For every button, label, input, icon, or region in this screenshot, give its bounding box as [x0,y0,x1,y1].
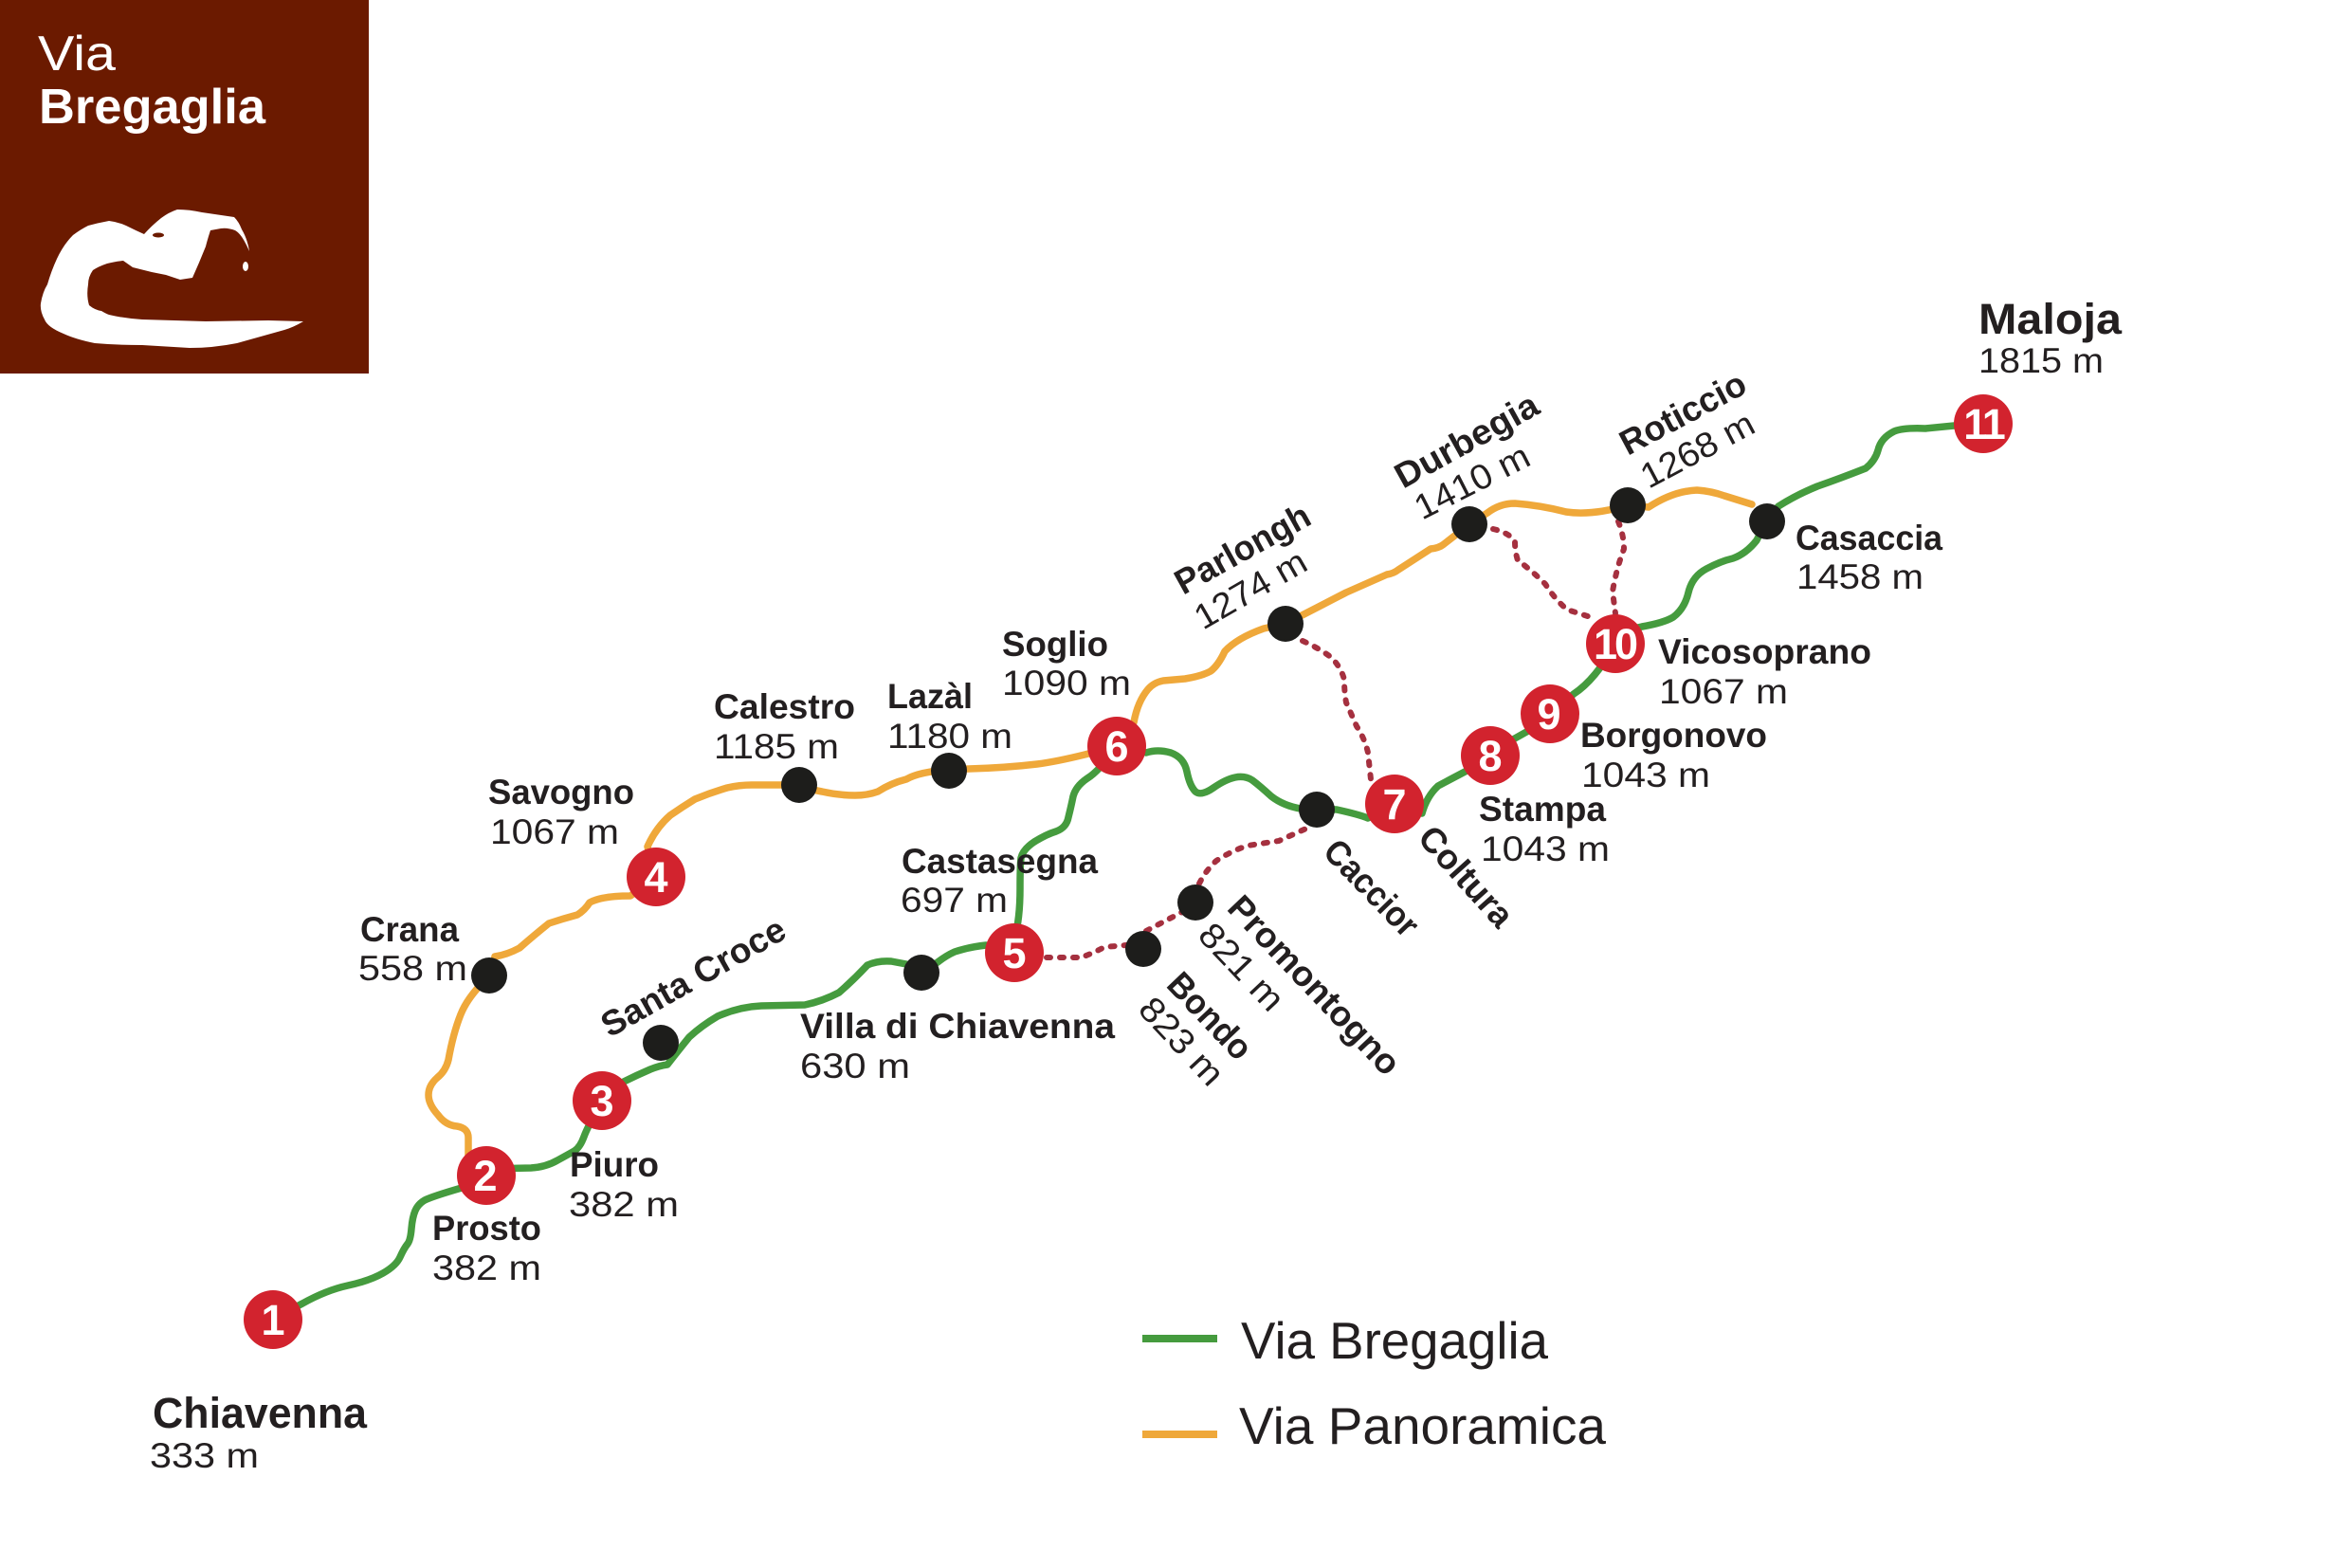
label: Soglio [1002,625,1131,702]
label: Casaccia: Casaccia [1796,519,1942,557]
numbered stage marker 8 [1461,726,1520,785]
numbered stage marker 5 [985,923,1044,982]
label: Chiavenna [150,1389,368,1475]
label: Lazàl: 1180 m [887,717,1012,756]
label: Borgonovo [1580,716,1767,794]
label: Roticcio: 1268 m [1634,404,1761,496]
numbered stage marker 1 [244,1290,302,1349]
label: Maloja [1978,295,2123,380]
label: Borgonovo: 1043 m [1581,756,1710,794]
numbered stage marker 7: 7 [1382,780,1407,829]
numbered stage marker 8: 8 [1478,732,1503,780]
label: Soglio: 1090 m [1002,664,1131,702]
label: Bondo [1131,964,1260,1093]
route: dotted connections [1047,521,1624,957]
numbered stage marker 6: 6 [1104,722,1129,771]
label: Piuro [569,1145,679,1224]
label: Castasegna: Castasegna [902,842,1098,881]
label: Crana: Crana [360,910,459,949]
numbered stage marker 3: 3 [590,1077,614,1125]
label: Villa di Chiavenna: Villa di Chiavenna [800,1007,1115,1046]
label: Durbegia: Durbegia [1388,385,1545,496]
route: Via Panoramica (orange) [428,490,1752,1176]
label: Vicosoprano: 1067 m [1659,672,1788,711]
label: Maloja: Maloja [1978,295,2123,343]
numbered stage marker 10: 10 [1594,620,1637,668]
numbered stage marker 9 [1521,684,1579,743]
title: Via Bregaglia [38,27,266,135]
numbered stage marker 2 [457,1146,516,1205]
label: Bondo: 823 m [1131,989,1232,1093]
label: Bondo: Bondo [1159,964,1260,1067]
label: Lazàl [887,677,1012,756]
label: Villa di Chiavenna: 630 m [800,1047,910,1085]
route: Via Bregaglia (green) [273,423,1983,1319]
label: Prosto: 382 m [432,1249,541,1287]
numbered stage marker 10 [1586,614,1645,673]
label: Promontogno: Promontogno [1220,887,1409,1083]
icon: brush stroke bird [41,210,303,348]
label: Coltura: Coltura [1411,818,1522,936]
label: Calestro [714,687,855,766]
label: Stampa: Stampa [1479,790,1606,829]
label: Santa Croce: Santa Croce [594,909,793,1045]
label: Chiavenna: 333 m [150,1436,259,1475]
label: Villa di Chiavenna [800,1007,1115,1085]
label: Calestro: Calestro [714,687,855,726]
label: Crana: 558 m [358,949,467,988]
label: Vicosoprano [1658,632,1871,711]
label: Piuro: Piuro [570,1145,659,1184]
label: Savogno: Savogno [488,773,634,811]
numbered stage marker 3 [573,1071,631,1130]
label: Casaccia: 1458 m [1796,557,1924,596]
label: Crana [358,910,467,988]
label: Soglio: Soglio [1002,625,1108,664]
numbered stage marker 2: 2 [473,1152,498,1200]
label: Vicosoprano: Vicosoprano [1658,632,1871,671]
numbered stage marker 4: 4 [644,853,668,902]
label: Castasegna [901,842,1098,920]
numbered stage marker 5: 5 [1002,929,1027,977]
numbered stage marker 4 [627,848,685,906]
label: Savogno [488,773,634,851]
label: Savogno: 1067 m [490,812,619,851]
label: Durbegia: 1410 m [1408,436,1536,527]
legend item: Via Bregaglia: Via Bregaglia [1241,1311,1548,1370]
label: Piuro: 382 m [569,1185,679,1224]
label: Roticcio: Roticcio [1614,364,1753,463]
label: Borgonovo: Borgonovo [1580,716,1767,755]
numbered stage marker 1: 1 [261,1296,285,1344]
label: Stampa [1479,790,1610,868]
label: Stampa: 1043 m [1481,830,1610,868]
label: Prosto: Prosto [432,1209,541,1248]
numbered stage marker 11: 11 [1963,400,2005,448]
numbered stage marker 6 [1087,717,1146,775]
legend [1142,1311,1606,1455]
label: Castasegna: 697 m [901,881,1008,920]
numbered stage marker 9: 9 [1537,690,1561,738]
label: Casaccia [1796,519,1942,596]
label: Calestro: 1185 m [714,727,839,766]
title: Via Bregaglia: Via [38,27,116,82]
label: Promontogno: 821 m [1191,915,1292,1019]
label: Maloja: 1815 m [1978,341,2104,380]
numbered stage marker 7 [1365,775,1424,833]
label: Prosto [432,1209,541,1287]
label: Parlongh: 1274 m [1187,541,1314,637]
label: Chiavenna: Chiavenna [153,1389,368,1437]
label: Parlongh: Parlongh [1168,496,1317,602]
title: Via Bregaglia: Bregaglia [39,80,266,135]
label: Caccior: Caccior [1316,831,1427,944]
panel: logo [0,0,369,374]
black waypoint dots [471,487,1785,1061]
numbered stage marker 11 [1954,394,2013,453]
label: Lazàl: Lazàl [887,677,973,716]
legend item: Via Panoramica: Via Panoramica [1239,1396,1606,1455]
